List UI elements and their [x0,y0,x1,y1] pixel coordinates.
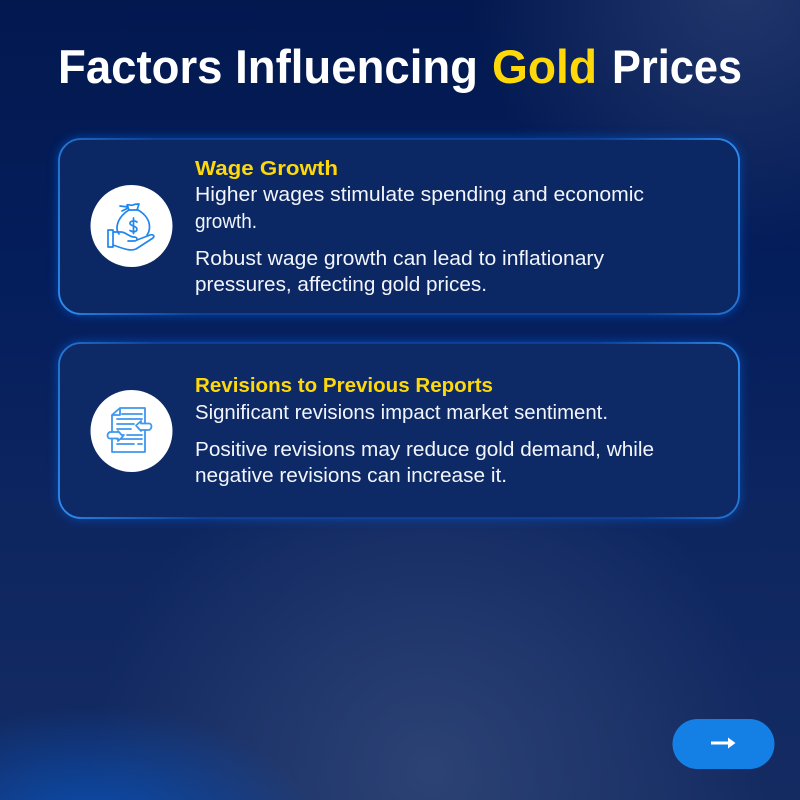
text: wage growth line 2: growth. [195,211,257,233]
icon: arrow [711,738,736,748]
panel: wage growth [58,138,740,315]
heading: revisions: Revisions to Previous Reports [195,374,493,397]
text: revisions line 3: negative revisions can increase it. [195,465,507,487]
icon: money bag in hand [90,185,172,267]
next button [672,719,774,769]
heading: wage growth: Wage Growth [195,157,338,180]
panel: revisions [58,342,740,519]
title [58,40,742,93]
text: revisions line 1: Significant revisions impact market sentiment. [195,402,608,424]
title: Gold [492,40,597,93]
title: Prices [612,40,742,93]
title: Factors Influencing [58,40,478,93]
text: wage growth line 4: pressures, affecting gold prices. [195,274,487,296]
text: revisions line 2: Positive revisions may reduce gold demand, while [195,439,654,461]
icon: document with arrows [90,390,172,472]
text: wage growth line 1: Higher wages stimulate spending and economic [195,184,644,206]
text: wage growth line 3: Robust wage growth can lead to inflationary [195,248,604,270]
